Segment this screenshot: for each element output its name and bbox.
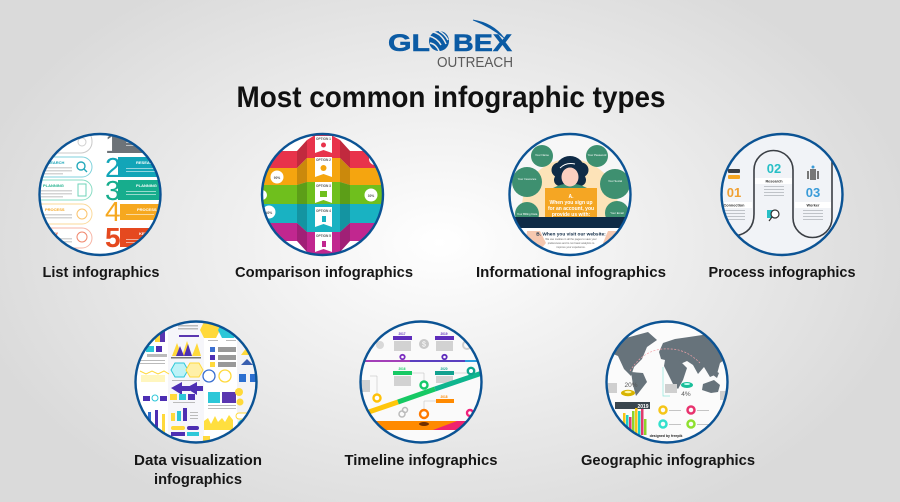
panel: comparison infographics bbox=[235, 133, 413, 281]
image: process path thumbnail bbox=[721, 130, 843, 255]
label: Timeline infographics bbox=[344, 452, 498, 469]
logo: Globex Outreach: GL bbox=[388, 30, 430, 57]
image: comparison ribbons thumbnail: 30% bbox=[368, 194, 374, 198]
image: process path thumbnail: Research bbox=[765, 180, 783, 184]
image: list infographic thumbnail: RESEARCH bbox=[42, 160, 65, 165]
image: informational character thumbnail: A. bbox=[568, 194, 574, 200]
image: informational character thumbnail: preferences and to run basic analytics to bbox=[548, 241, 595, 245]
title: Most common infographic types bbox=[236, 81, 666, 114]
panel: timeline infographics bbox=[344, 321, 498, 469]
label: Comparison infographics bbox=[235, 264, 413, 281]
image: timeline thumbnail: 2018 bbox=[440, 395, 448, 399]
image: informational character thumbnail: B. When you visit our website: bbox=[536, 232, 606, 238]
image: informational character thumbnail bbox=[509, 133, 631, 256]
logo: Globex Outreach: OUTREACH bbox=[437, 55, 513, 71]
image: timeline thumbnail: 2016 bbox=[398, 367, 406, 371]
image: list infographic thumbnail: PLANNING bbox=[136, 183, 157, 188]
image: list infographic thumbnail: PROCESS bbox=[137, 207, 157, 212]
image: timeline thumbnail: $ bbox=[422, 342, 426, 348]
image: process path thumbnail: 03 bbox=[806, 185, 820, 200]
image: process path thumbnail: 01 bbox=[727, 185, 741, 200]
label: Informational infographics bbox=[476, 264, 666, 281]
image: comparison ribbons thumbnail: OPTION 2 bbox=[316, 158, 331, 162]
image: process path thumbnail: 02 bbox=[767, 161, 781, 176]
character: woman with curly hair bbox=[552, 156, 588, 188]
image: informational character thumbnail: provide us with: bbox=[552, 212, 590, 218]
image: comparison ribbons thumbnail: 40% bbox=[266, 211, 272, 215]
image: informational character thumbnail: for an account, you bbox=[548, 206, 594, 212]
label: infographics bbox=[154, 471, 242, 488]
image: comparison ribbons thumbnail: OPTION 1 bbox=[316, 137, 331, 141]
image: list infographic thumbnail: 2 bbox=[105, 152, 121, 183]
image: comparison ribbons thumbnail bbox=[263, 135, 382, 254]
image: comparison ribbons thumbnail: OPTION 3 bbox=[316, 184, 331, 188]
panel: list infographics bbox=[38, 132, 162, 280]
image: timeline thumbnail: 2020 bbox=[440, 367, 448, 371]
image: list infographic thumbnail: PLANNING bbox=[43, 183, 64, 188]
image: comparison ribbons thumbnail: 90% bbox=[274, 176, 280, 180]
label: Geographic infographics bbox=[581, 452, 755, 469]
image: list infographic thumbnail bbox=[40, 135, 160, 254]
image: list infographic thumbnail: RESEARCH bbox=[136, 160, 159, 165]
image: list infographic thumbnail: KEY bbox=[139, 231, 148, 236]
image: process path thumbnail: Connection bbox=[724, 204, 745, 208]
image: data visualization thumbnail bbox=[135, 321, 261, 443]
image: world map thumbnail: 4% bbox=[681, 391, 691, 398]
image: informational character thumbnail: Your Email bbox=[610, 211, 624, 215]
image: informational character thumbnail: Your Social bbox=[608, 179, 622, 183]
image: comparison ribbons thumbnail: OPTION 5 bbox=[316, 234, 331, 238]
image: list infographic thumbnail: 4 bbox=[105, 196, 121, 227]
panel: informational infographics bbox=[476, 133, 666, 281]
image: list infographic thumbnail: 3 bbox=[105, 175, 121, 206]
image: timeline thumbnail bbox=[362, 332, 480, 442]
panel: process infographics bbox=[708, 130, 856, 281]
label: Data visualization bbox=[134, 452, 262, 469]
logo: Globex Outreach: BEX bbox=[453, 30, 512, 57]
icon: striped globe bbox=[429, 31, 449, 51]
image: world map thumbnail bbox=[606, 321, 732, 443]
image: informational character thumbnail: When you sign up bbox=[549, 200, 593, 206]
image: informational character thumbnail: Your Billing Data bbox=[517, 212, 538, 216]
image: process path thumbnail: Worker bbox=[806, 204, 820, 208]
image: list infographic thumbnail: 1 bbox=[105, 128, 121, 159]
panel: geographic infographics bbox=[581, 321, 755, 469]
image: world map thumbnail: 20% bbox=[624, 382, 638, 389]
image: informational character thumbnail: Your Password bbox=[588, 153, 607, 157]
label bbox=[134, 452, 262, 488]
image: informational character thumbnail: Your Name bbox=[535, 153, 549, 157]
image: list infographic thumbnail: 5 bbox=[105, 222, 121, 253]
image: informational character thumbnail: improve your experience. bbox=[556, 245, 586, 249]
image: timeline thumbnail: 2017 bbox=[398, 332, 406, 336]
label: List infographics bbox=[42, 264, 160, 281]
logo: Globex Outreach bbox=[388, 20, 513, 71]
label: Process infographics bbox=[708, 264, 856, 281]
image: list infographic thumbnail: PROCESS bbox=[45, 207, 65, 212]
image: informational character thumbnail: We use cookies in all the pages to save your bbox=[545, 237, 597, 241]
image: informational character thumbnail: Your Insurance bbox=[518, 177, 537, 181]
image: comparison ribbons thumbnail: OPTION 4 bbox=[316, 209, 331, 213]
panel: data visualization infographics bbox=[134, 321, 262, 488]
image: list infographic thumbnail: KEY bbox=[50, 231, 59, 236]
image: timeline thumbnail: 2019 bbox=[440, 332, 448, 336]
image: world map thumbnail: 2019 bbox=[637, 404, 649, 410]
image: world map thumbnail: designed by freepik bbox=[650, 434, 682, 438]
